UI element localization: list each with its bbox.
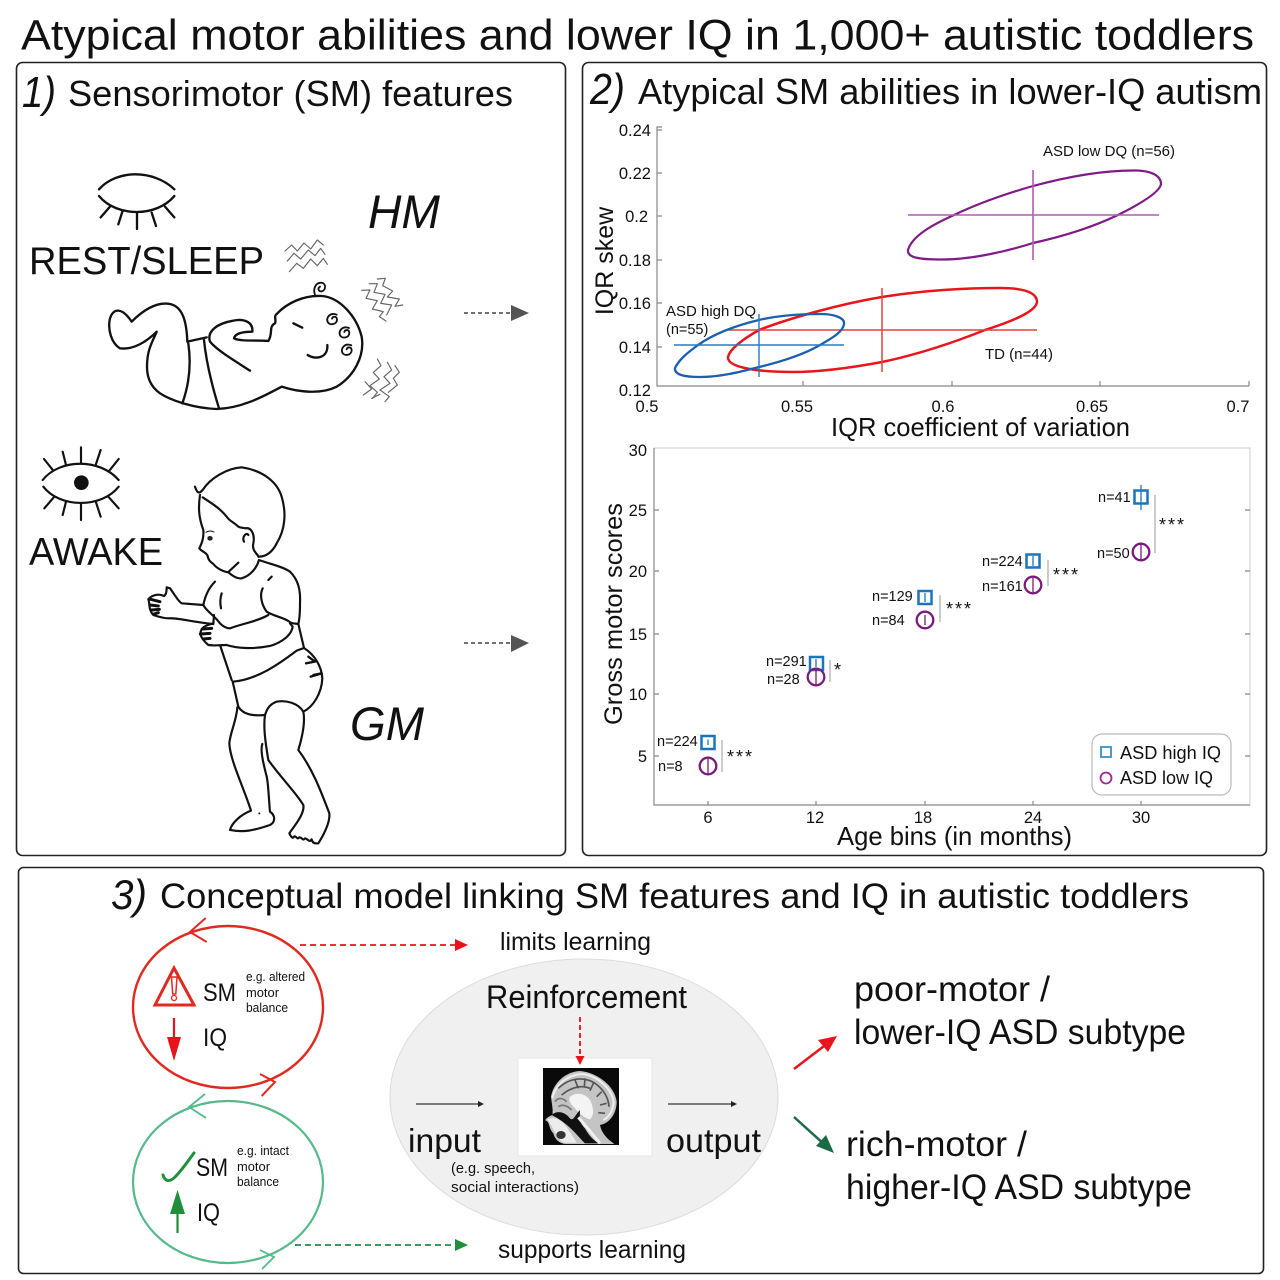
y axis label: Gross motor scores	[600, 503, 628, 725]
sample size labels: n=224	[657, 734, 698, 750]
sample size labels: n=50	[1097, 546, 1130, 562]
low IQ markers	[700, 544, 1149, 774]
sample size labels: n=84	[872, 613, 905, 629]
significance stars: ***	[727, 747, 752, 767]
legend: ASD high IQ	[1120, 743, 1221, 763]
panel 3: conceptual model	[18, 868, 1264, 1274]
gross motor scatter chart: 24	[1024, 809, 1042, 827]
icon: warning triangle	[155, 968, 194, 1005]
input examples: social interactions)	[451, 1179, 579, 1196]
arrow: reinforcement to brain	[576, 1017, 584, 1065]
small note: altered motor balance	[246, 970, 305, 1015]
ellipse: ASD low DQ	[908, 170, 1161, 260]
gross motor scatter chart: 25	[629, 502, 647, 520]
image: brain scan	[518, 1058, 652, 1156]
limits learning label: limits learning	[500, 928, 651, 956]
ellipse chart: 0.7	[1227, 398, 1249, 416]
sample size labels: n=8	[658, 759, 683, 775]
GM label: GM	[350, 697, 425, 750]
icon: check mark	[163, 1153, 194, 1181]
panel 2: atypical SM abilities	[582, 62, 1266, 856]
ellipse labels: ASD low DQ (n=56)	[1043, 144, 1175, 160]
sample size labels: n=224	[982, 554, 1023, 570]
small note: intact motor balance: e.g. intact	[237, 1144, 290, 1158]
arrow: to poor-motor subtype	[794, 1036, 837, 1069]
HM label: HM	[368, 185, 441, 238]
input label: input	[408, 1122, 481, 1159]
panel 2 heading: Atypical SM abilities in lower-IQ autism	[638, 71, 1262, 112]
gross motor scatter chart: 30	[629, 442, 647, 460]
arrow: HM to chart	[464, 305, 529, 321]
ellipse labels: ASD high DQ	[666, 304, 756, 320]
outcome: rich-motor subtype	[846, 1125, 1192, 1207]
central learning oval	[390, 959, 778, 1235]
green loop: intact SM	[133, 1094, 323, 1269]
y axis label: IQR skew	[591, 206, 619, 315]
red loop: poor SM: IQ	[203, 1024, 227, 1052]
awake label: AWAKE	[29, 531, 163, 574]
outcome: poor-motor subtype: poor-motor /	[854, 970, 1050, 1009]
small note: intact motor balance: motor	[237, 1160, 270, 1174]
ellipse chart: 0.5	[636, 398, 658, 416]
significance brackets	[722, 495, 1155, 772]
ellipse chart: 0.2	[625, 208, 648, 226]
green loop: intact SM: IQ	[197, 1199, 220, 1227]
small note: altered motor balance: balance	[246, 1001, 288, 1015]
ellipse: ASD high DQ	[674, 314, 844, 377]
ellipse labels	[666, 144, 1175, 363]
gross motor scatter chart: 20	[629, 563, 647, 581]
ellipse chart: 0.16	[619, 295, 651, 313]
red loop: poor SM: SM	[203, 979, 236, 1007]
sample size labels: n=41	[1098, 490, 1131, 506]
icon: closed eye	[99, 174, 174, 229]
gross motor scatter chart: 12	[806, 809, 824, 827]
significance stars	[727, 515, 1184, 767]
icon: open eye	[43, 447, 119, 520]
gross motor scatter chart: 18	[914, 809, 932, 827]
ellipse chart: 0.12	[619, 382, 651, 400]
legend: ASD low IQ	[1120, 768, 1213, 788]
ellipse: TD	[727, 288, 1037, 372]
gross motor scatter chart: 30	[1132, 809, 1150, 827]
illustration: sleeping baby	[109, 283, 362, 409]
gross motor scatter chart: 6	[703, 809, 713, 827]
ellipse chart: 0.18	[619, 252, 651, 270]
small note: altered motor balance: e.g. altered	[246, 970, 305, 984]
rest/sleep label: REST/SLEEP	[29, 240, 264, 283]
outcome: poor-motor subtype: lower-IQ ASD subtype	[854, 1013, 1186, 1052]
arrow: input	[416, 1101, 484, 1107]
arrow: output	[668, 1101, 737, 1107]
x axis label: IQR coefficient of variation	[831, 412, 1130, 442]
output label: output	[666, 1122, 761, 1159]
ellipse chart: 0.24	[619, 122, 651, 140]
sample size labels: n=161	[982, 579, 1023, 595]
arrow: IQ up	[170, 1190, 185, 1233]
arrow: limits learning	[300, 939, 468, 951]
sample size labels	[657, 490, 1131, 775]
ellipse labels: TD (n=44)	[985, 347, 1053, 363]
small note: altered motor balance: motor	[246, 986, 279, 1000]
panel 2 heading: 2)	[589, 65, 625, 114]
ellipse chart	[591, 122, 1249, 442]
input examples: (e.g. speech,	[451, 1160, 535, 1177]
ellipse chart: 0.65	[1076, 398, 1108, 416]
legend	[1092, 734, 1231, 795]
ellipse chart: 0.22	[619, 165, 651, 183]
small note: intact motor balance: balance	[237, 1175, 279, 1189]
panel 3 heading: Conceptual model linking SM features and IQ in autistic toddlers	[160, 877, 1189, 916]
arrow: IQ down	[167, 1018, 181, 1061]
illustration: walking toddler	[148, 467, 329, 843]
green loop: intact SM: SM	[196, 1154, 228, 1182]
outcome: rich-motor subtype: rich-motor /	[846, 1125, 1027, 1164]
reinforcement label: Reinforcement	[486, 979, 687, 1015]
supports learning label: supports learning	[498, 1236, 686, 1264]
sample size labels: n=28	[767, 672, 800, 688]
gross motor scatter chart: 15	[629, 626, 647, 644]
gross motor scatter chart: 5	[638, 748, 647, 766]
significance stars: ***	[946, 599, 971, 619]
panel 1: sensorimotor features	[16, 62, 566, 856]
panel 1 heading: Sensorimotor (SM) features	[68, 73, 513, 114]
gross motor scatter chart	[600, 442, 1250, 851]
input examples	[451, 1160, 579, 1196]
high IQ markers	[702, 485, 1148, 749]
panel 3 heading: 3)	[111, 871, 147, 918]
ellipse chart: 0.14	[619, 339, 651, 357]
red loop: poor SM	[133, 918, 323, 1096]
ellipse chart: 0.55	[781, 398, 813, 416]
significance stars: ***	[1053, 565, 1078, 585]
significance stars: *	[834, 660, 841, 680]
arrow: to rich-motor subtype	[794, 1117, 834, 1153]
significance stars: ***	[1159, 515, 1184, 535]
squiggle marks: head movement	[285, 240, 403, 402]
sample size labels: n=291	[766, 654, 807, 670]
panel 1 heading: 1)	[22, 68, 56, 117]
small note: intact motor balance	[237, 1144, 290, 1189]
title: Atypical motor abilities and lower IQ in 1,000+ autistic toddlers	[21, 12, 1254, 60]
outcome: rich-motor subtype: higher-IQ ASD subtype	[846, 1168, 1192, 1207]
arrow: supports learning	[295, 1239, 468, 1251]
ellipse labels: (n=55)	[666, 322, 708, 338]
arrow: GM to chart	[464, 635, 529, 652]
gross motor scatter chart: 10	[629, 686, 647, 704]
outcome: poor-motor subtype	[854, 970, 1186, 1052]
sample size labels: n=129	[872, 589, 913, 605]
x axis label: Age bins (in months)	[837, 821, 1072, 851]
ellipse chart: 0.6	[932, 398, 954, 416]
